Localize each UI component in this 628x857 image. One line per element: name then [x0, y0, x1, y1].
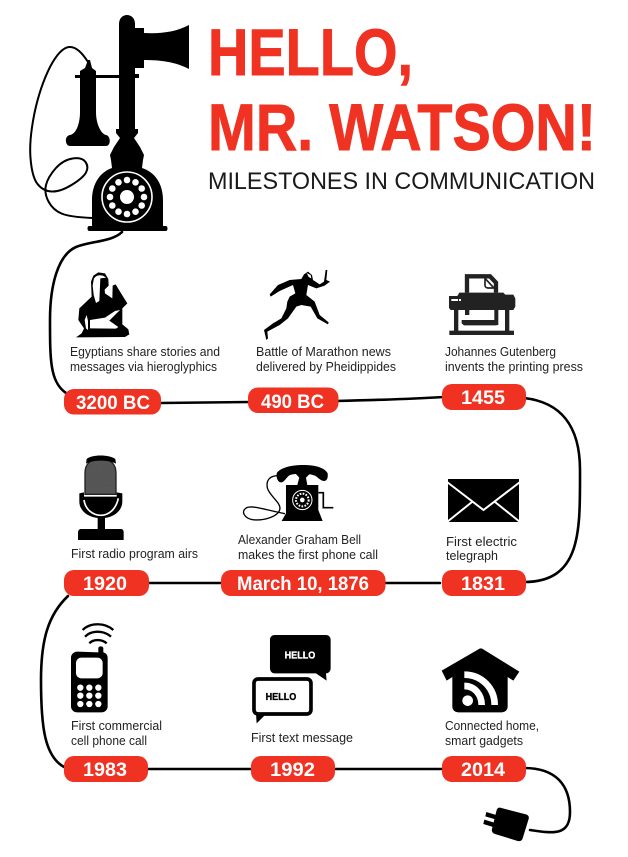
icon: Egyptian scribe — [76, 272, 129, 337]
telephone cord — [30, 47, 92, 218]
icon: radio microphone — [78, 455, 124, 540]
date pill — [251, 756, 335, 782]
icon: connected home — [442, 648, 519, 712]
date pill: 3200 BC — [76, 392, 150, 414]
icon: envelope — [447, 479, 520, 522]
caption: smart gadgets — [445, 733, 523, 748]
stand arm and stem — [75, 15, 189, 231]
date pill: 490 BC — [261, 391, 324, 413]
caption — [238, 532, 378, 562]
date pill: 1983 — [83, 759, 127, 781]
caption: Battle of Marathon news — [256, 344, 391, 359]
icon: wall telephone — [244, 465, 333, 521]
milestone: 1455 — [442, 276, 583, 410]
caption: First electric — [446, 534, 518, 549]
date pill — [64, 756, 148, 782]
caption: Johannes Gutenberg — [445, 344, 556, 359]
timeline cord — [41, 232, 580, 832]
caption — [445, 344, 583, 374]
caption: messages via hieroglyphics — [70, 359, 217, 374]
icon: plug — [483, 808, 529, 841]
caption: cell phone call — [71, 733, 147, 748]
icon: printing press — [449, 276, 515, 335]
milestone: 1992 — [251, 635, 353, 782]
date pill — [64, 570, 149, 596]
caption: First commercial — [71, 718, 162, 733]
icon: candlestick telephone — [30, 15, 189, 231]
date pill — [442, 384, 526, 410]
icon: running Pheidippides — [264, 270, 330, 340]
caption — [445, 718, 539, 748]
caption: Connected home, — [445, 718, 539, 733]
rotary dial — [102, 172, 152, 222]
caption — [71, 718, 162, 748]
milestone: 1983 — [64, 624, 162, 782]
caption: First text message — [251, 730, 353, 745]
caption: Egyptians share stories and — [70, 344, 220, 359]
milestone: March 10, 1876 — [221, 465, 386, 596]
icon: speech bubbles — [254, 635, 331, 723]
icon: cell phone with signal — [71, 624, 113, 712]
caption: Alexander Graham Bell — [238, 532, 361, 547]
milestone: 490 BC — [248, 270, 396, 413]
date pill: 2014 — [461, 759, 505, 781]
caption: telegraph — [446, 548, 498, 563]
icon: speech bubbles: HELLO — [285, 650, 316, 661]
caption — [446, 534, 518, 563]
earpiece — [66, 60, 110, 146]
subtitle: MILESTONES IN COMMUNICATION — [208, 168, 595, 195]
date pill — [64, 389, 161, 414]
date pill: March 10, 1876 — [237, 573, 369, 595]
date pill: 1920 — [83, 573, 127, 595]
date pill: 1992 — [270, 759, 315, 781]
milestone: 1831 — [442, 479, 526, 596]
milestone: 3200 BC — [64, 272, 220, 414]
date pill — [248, 388, 338, 413]
date pill: 1831 — [461, 573, 505, 595]
icon: speech bubbles: HELLO — [266, 692, 297, 703]
title — [208, 15, 596, 164]
date pill: 1455 — [461, 387, 505, 409]
title: HELLO, — [208, 15, 413, 89]
caption: makes the first phone call — [238, 547, 378, 562]
milestone: 1920 — [64, 455, 198, 596]
caption: First radio program airs — [71, 546, 198, 561]
caption: invents the printing press — [445, 359, 583, 374]
caption: delivered by Pheidippides — [256, 359, 396, 374]
milestone: 2014 — [442, 648, 539, 782]
caption — [256, 344, 396, 374]
caption — [70, 344, 220, 374]
